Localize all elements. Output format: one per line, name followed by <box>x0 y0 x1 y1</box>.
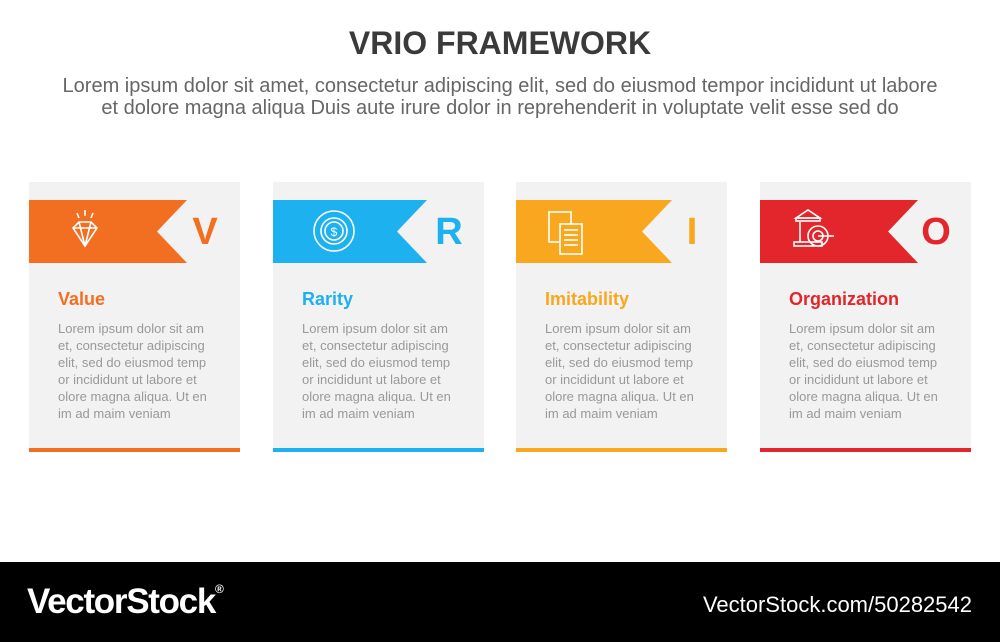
heading: imitability: Imitability <box>545 289 629 309</box>
panel: value <box>29 182 240 452</box>
text: rarity: or incididunt ut labore et <box>302 372 441 387</box>
text: imitability: im ad maim veniam <box>545 406 658 421</box>
text: organization: Lorem ipsum dolor sit am <box>789 321 935 336</box>
letter V: V <box>192 211 218 253</box>
text: value: olore magna aliqua. Ut en <box>58 389 207 404</box>
heading: value: Value <box>58 289 105 309</box>
title: VRIO FRAMEWORK <box>349 25 651 61</box>
text: organization: or incididunt ut labore et <box>789 372 928 387</box>
text: organization: olore magna aliqua. Ut en <box>789 389 938 404</box>
letter O: O <box>921 211 951 253</box>
text: value: elit, sed do eiusmod temp <box>58 355 206 370</box>
banner: imitability <box>516 200 672 263</box>
footer logo: VectorStock® <box>27 582 223 621</box>
text: organization: elit, sed do eiusmod temp <box>789 355 937 370</box>
text: value: or incididunt ut labore et <box>58 372 197 387</box>
panel: organization <box>760 182 971 452</box>
subtitle: Lorem ipsum dolor sit amet, consectetur adipiscing elit, sed do eiusmod tempor incididunt ut labore <box>63 75 937 97</box>
panel: rarity <box>273 182 484 452</box>
text: rarity <box>302 321 451 421</box>
footer <box>0 562 1000 642</box>
text: rarity: olore magna aliqua. Ut en <box>302 389 451 404</box>
text: value: Lorem ipsum dolor sit am <box>58 321 204 336</box>
text: imitability: or incididunt ut labore et <box>545 372 684 387</box>
text: rarity: Lorem ipsum dolor sit am <box>302 321 448 336</box>
heading: rarity: Rarity <box>302 289 353 309</box>
text: imitability: elit, sed do eiusmod temp <box>545 355 693 370</box>
text: imitability: Lorem ipsum dolor sit am <box>545 321 691 336</box>
subtitle: et dolore magna aliqua Duis aute irure dolor in reprehenderit in voluptate velit esse sed do <box>101 97 899 119</box>
text: rarity: elit, sed do eiusmod temp <box>302 355 450 370</box>
banner: rarity <box>273 200 427 263</box>
banner: organization <box>760 200 918 263</box>
footer url: VectorStock.com/50282542 <box>703 592 972 617</box>
letter R: R <box>435 211 463 253</box>
text: imitability <box>545 321 694 421</box>
heading: organization: Organization <box>789 289 899 309</box>
banner: rarity: $ <box>331 225 338 239</box>
subtitle <box>63 75 937 119</box>
panel: imitability <box>516 182 727 452</box>
text: organization <box>789 321 938 421</box>
text: rarity: et, consectetur adipiscing <box>302 338 449 353</box>
banner: value <box>29 200 187 263</box>
text: imitability: olore magna aliqua. Ut en <box>545 389 694 404</box>
text: value: im ad maim veniam <box>58 406 171 421</box>
text: value: et, consectetur adipiscing <box>58 338 205 353</box>
letter I: I <box>687 211 697 253</box>
text: rarity: im ad maim veniam <box>302 406 415 421</box>
text: organization: im ad maim veniam <box>789 406 902 421</box>
text: value <box>58 321 207 421</box>
text: imitability: et, consectetur adipiscing <box>545 338 692 353</box>
text: organization: et, consectetur adipiscing <box>789 338 936 353</box>
